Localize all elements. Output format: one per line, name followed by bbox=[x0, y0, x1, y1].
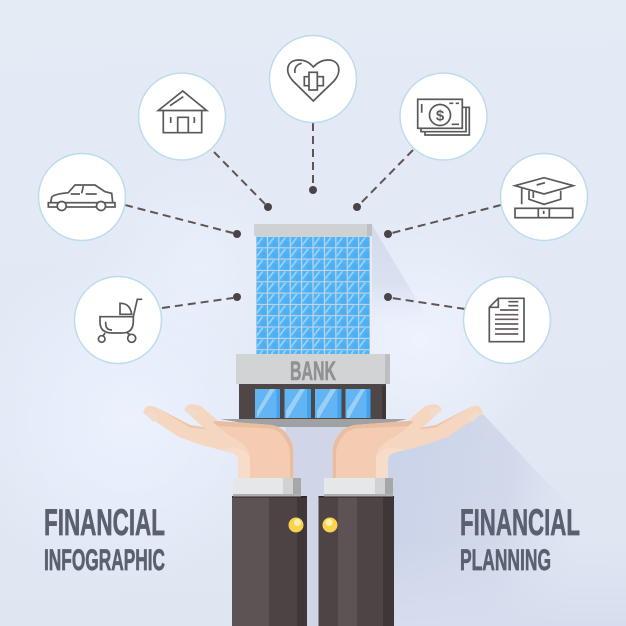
sign shade bbox=[385, 354, 390, 384]
line: document bbox=[392, 298, 465, 309]
line: house bbox=[214, 152, 265, 204]
heading: financial infographic: INFOGRAPHIC bbox=[44, 544, 165, 577]
line: heart bbox=[312, 123, 314, 186]
icon circles bbox=[38, 36, 588, 364]
windows bbox=[255, 389, 370, 418]
circle: car bbox=[38, 154, 126, 240]
circle: heart bbox=[270, 36, 356, 122]
left button bbox=[288, 518, 304, 532]
heading: financial planning: PLANNING bbox=[460, 544, 551, 577]
hands long shadow bbox=[388, 414, 626, 626]
right button bbox=[322, 518, 338, 532]
right sleeve bbox=[318, 496, 394, 626]
icon: graduation cap bbox=[515, 178, 573, 218]
sign label: BANK bbox=[290, 356, 336, 386]
roof bbox=[254, 224, 372, 236]
circle: document bbox=[464, 276, 550, 364]
left sleeve bbox=[232, 496, 307, 626]
connector lines bbox=[125, 123, 501, 309]
roof shade bbox=[367, 224, 372, 236]
circle: house bbox=[138, 73, 226, 160]
dollar sign: $ bbox=[436, 108, 445, 124]
heading: financial infographic bbox=[44, 502, 165, 577]
circle: money bbox=[400, 73, 487, 160]
sign band bbox=[236, 354, 390, 384]
icon: heart bbox=[288, 60, 339, 101]
left hand bbox=[143, 404, 293, 478]
storefront right shade bbox=[382, 386, 386, 419]
line: car bbox=[125, 205, 233, 233]
left cuff bbox=[233, 478, 301, 496]
right hand bbox=[333, 404, 483, 478]
shadow between sleeves bbox=[285, 427, 375, 626]
glass tower bbox=[256, 236, 370, 354]
circle: graduation bbox=[500, 154, 588, 240]
line: money bbox=[360, 150, 413, 204]
platform bbox=[220, 419, 407, 427]
line: stroller bbox=[162, 298, 233, 308]
heading: financial infographic: FINANCIAL bbox=[44, 502, 165, 543]
building bbox=[220, 224, 407, 427]
icon: house bbox=[158, 91, 207, 133]
icon: car bbox=[48, 185, 115, 210]
line: graduation bbox=[392, 205, 501, 233]
circle: stroller bbox=[74, 276, 162, 364]
right cuff bbox=[324, 478, 393, 496]
icon: document bbox=[489, 298, 524, 342]
icon: stroller bbox=[98, 299, 142, 342]
building long shadow bbox=[372, 225, 450, 355]
heading: financial planning bbox=[460, 502, 580, 577]
icon: money bbox=[418, 99, 469, 135]
storefront bbox=[239, 384, 386, 419]
bottom right shade bbox=[394, 540, 626, 626]
connector dots bbox=[233, 186, 392, 301]
